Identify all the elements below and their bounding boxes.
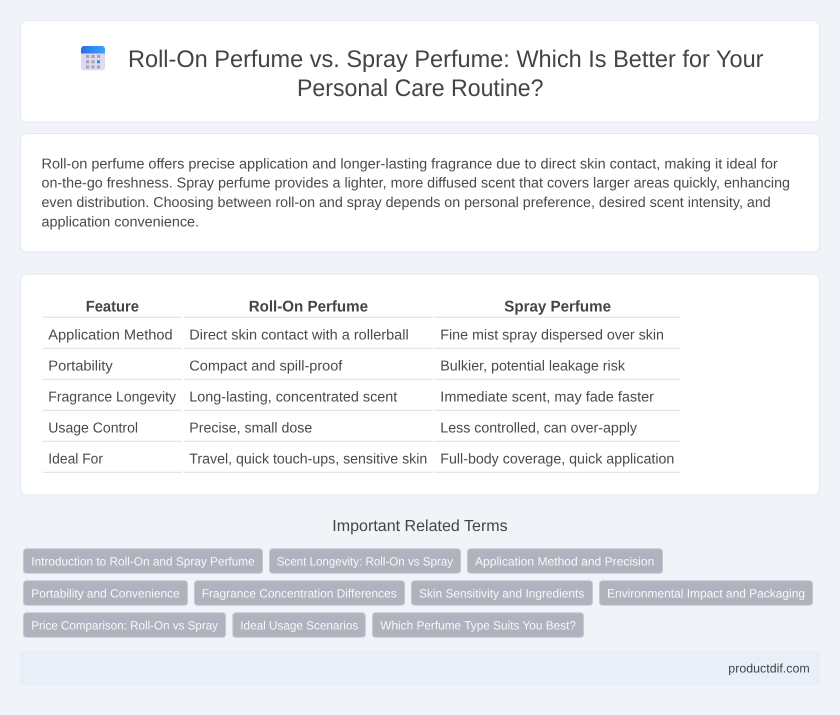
table row: usage control: Precise, small dose <box>189 420 312 436</box>
table row: ideal for <box>43 451 680 473</box>
tag <box>24 581 188 605</box>
tag list: related terms <box>24 549 812 637</box>
table row: application method <box>43 327 680 349</box>
table row: portability: Bulkier, potential leakage risk <box>440 358 626 374</box>
table row: fragrance longevity <box>43 389 680 411</box>
tag: Portability and Convenience <box>31 586 180 600</box>
tag <box>412 581 592 605</box>
tag: Introduction to Roll-On and Spray Perfume <box>31 554 255 568</box>
tag: Environmental Impact and Packaging <box>607 586 805 600</box>
tag <box>600 581 812 605</box>
text block: intro paragraph: application convenience. <box>42 214 199 230</box>
tag: Price Comparison: Roll-On vs Spray <box>31 618 218 632</box>
title <box>128 46 764 102</box>
tag <box>372 613 584 637</box>
footer bar <box>20 651 820 685</box>
table header row <box>43 299 680 318</box>
tag <box>24 613 226 637</box>
table row: fragrance longevity: Fragrance Longevity <box>48 389 177 405</box>
tag <box>24 549 262 573</box>
table row: ideal for: Full-body coverage, quick application <box>440 451 674 467</box>
table row: fragrance longevity: Immediate scent, may fade faster <box>440 389 654 405</box>
tag <box>194 581 404 605</box>
tag: Fragrance Concentration Differences <box>202 586 397 600</box>
table row: application method: Fine mist spray dispersed over skin <box>440 327 664 343</box>
icon: calendar <box>81 46 105 70</box>
table row: portability: Portability <box>48 358 114 374</box>
tag: Ideal Usage Scenarios <box>240 618 358 632</box>
table row: portability: Compact and spill-proof <box>189 358 343 374</box>
table row: usage control: Less controlled, can over-apply <box>440 420 638 436</box>
tag: Which Perfume Type Suits You Best? <box>380 618 576 632</box>
tag: Skin Sensitivity and Ingredients <box>419 586 584 600</box>
text block: intro paragraph: even distribution. Choosing between roll-on and spray depends on personal preference, desired scent intensity, and <box>42 195 771 211</box>
text block: intro paragraph: Roll-on perfume offers precise application and longer-lasting fragrance due to direct skin contact, making it ideal for <box>42 156 778 172</box>
table header row: Feature <box>86 299 139 316</box>
table header row: Spray Perfume <box>504 299 611 316</box>
tag <box>270 549 460 573</box>
tag <box>468 549 662 573</box>
table row: portability <box>43 358 680 380</box>
text block: intro paragraph <box>42 156 790 230</box>
table row: application method: Direct skin contact with a rollerball <box>189 327 409 343</box>
table row: ideal for: Ideal For <box>48 451 103 467</box>
tag <box>233 613 365 637</box>
table row: fragrance longevity: Long-lasting, concentrated scent <box>189 389 397 405</box>
heading: important related terms: Important Related Terms <box>332 518 508 535</box>
panel: header <box>20 20 820 122</box>
table row: application method: Application Method <box>48 327 173 343</box>
footer source text: productdif.com <box>728 661 810 675</box>
panel: comparison table <box>20 274 820 495</box>
title: Personal Care Routine? <box>297 75 544 102</box>
panel: intro text <box>20 134 820 252</box>
table row: usage control: Usage Control <box>48 420 138 436</box>
tag: Application Method and Precision <box>475 554 654 568</box>
table row: ideal for: Travel, quick touch-ups, sensitive skin <box>189 451 427 467</box>
table row: usage control <box>43 420 680 442</box>
text block: intro paragraph: on-the-go freshness. Spray perfume provides a lighter, more diffused scent that covers larger areas quickly, enhancing <box>42 176 790 192</box>
title: Roll-On Perfume vs. Spray Perfume: Which Is Better for Your <box>128 46 764 73</box>
tag: Scent Longevity: Roll-On vs Spray <box>277 554 453 568</box>
table header row: Roll-On Perfume <box>249 299 368 316</box>
